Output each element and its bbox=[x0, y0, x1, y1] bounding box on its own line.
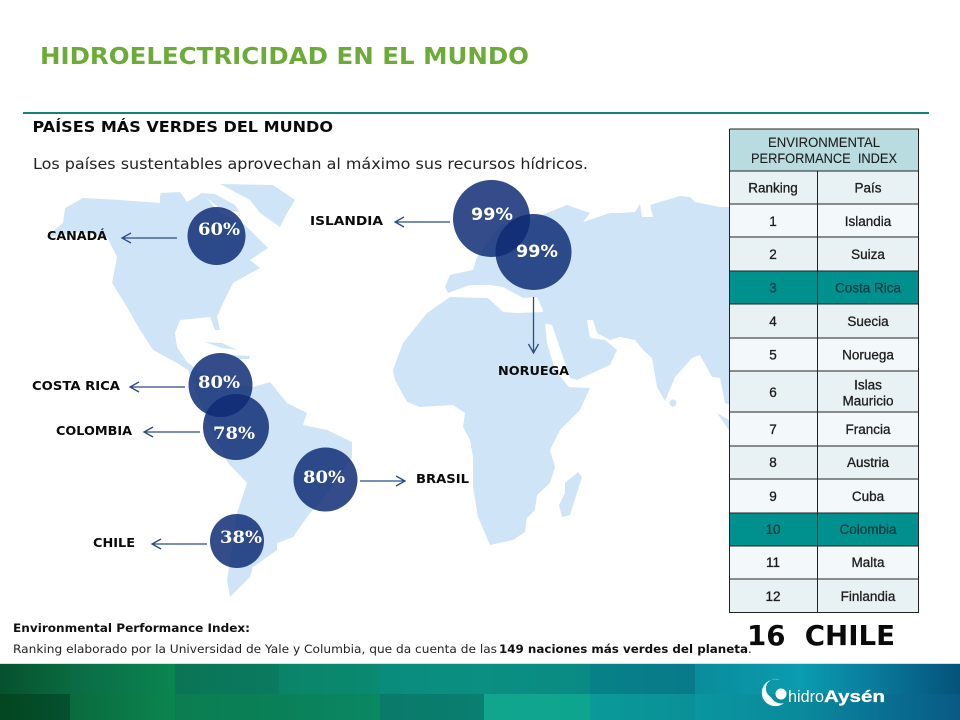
circle: Canadá: 60% bbox=[198, 220, 240, 239]
footer band bbox=[0, 663, 960, 720]
row 3 highlighted: 3 bbox=[769, 280, 777, 296]
row 4: 4 bbox=[769, 314, 777, 329]
row 3 highlighted bbox=[769, 280, 901, 296]
arrow: Chile bbox=[152, 539, 207, 549]
label: Chile: CHILE bbox=[93, 536, 135, 550]
intro text: Los países sustentables aprovechan al máximo sus recursos hídricos. bbox=[33, 155, 588, 173]
row 4 bbox=[769, 314, 889, 329]
footnote text: Ranking elaborado por la Universidad de Yale y Columbia, que da cuenta de las bbox=[13, 642, 497, 656]
row 6: Mauricio bbox=[842, 394, 894, 408]
row 6: Islas bbox=[854, 378, 882, 392]
footnote text: . bbox=[748, 642, 752, 656]
row 2: 2 bbox=[769, 247, 777, 262]
arrow: Islandia bbox=[395, 217, 450, 227]
arrow: Colombia bbox=[144, 427, 200, 437]
circle: Colombia: 78% bbox=[213, 424, 255, 443]
row 8: Austria bbox=[847, 455, 889, 470]
row 1 bbox=[769, 214, 892, 229]
circle: Colombia bbox=[203, 394, 269, 460]
row 10 highlighted: 10 bbox=[765, 522, 781, 537]
row 12: 12 bbox=[765, 589, 781, 604]
row 9 bbox=[769, 489, 885, 504]
row 9: 9 bbox=[769, 489, 777, 504]
label: Costa Rica: COSTA RICA bbox=[32, 379, 121, 393]
footnote heading: Environmental Performance Index: bbox=[13, 621, 250, 635]
row 8 bbox=[769, 455, 889, 470]
row 1: 1 bbox=[769, 214, 777, 229]
row 7 bbox=[769, 422, 891, 437]
arrow: Canadá bbox=[122, 233, 177, 243]
footnote text bbox=[13, 642, 752, 656]
world map bbox=[45, 184, 735, 597]
footnote text: 149 naciones más verdes del planeta bbox=[499, 642, 748, 656]
circle: Costa Rica: 80% bbox=[198, 373, 240, 392]
label: Brasil: BRASIL bbox=[416, 472, 469, 486]
row 12 bbox=[765, 589, 896, 604]
arrow: Brasil bbox=[360, 476, 405, 486]
row 5: 5 bbox=[769, 348, 777, 362]
row 9: Cuba bbox=[852, 489, 885, 504]
row 6 bbox=[769, 378, 894, 408]
row 6: 6 bbox=[769, 385, 777, 400]
column headers: País bbox=[854, 180, 882, 196]
row 11: 11 bbox=[766, 555, 780, 570]
ranking table bbox=[730, 129, 918, 612]
circle: Islandia: 99% bbox=[471, 205, 513, 224]
circle: Islandia bbox=[453, 180, 530, 257]
row 3 highlighted: Costa Rica bbox=[835, 280, 901, 296]
circle: Canadá bbox=[188, 207, 246, 265]
row 10 highlighted: Colombia bbox=[839, 522, 897, 537]
row 7: Francia bbox=[845, 422, 891, 437]
row 8: 8 bbox=[769, 455, 777, 470]
row 4: Suecia bbox=[847, 314, 889, 329]
logo: hidroAysén bbox=[762, 679, 885, 706]
row 2 bbox=[769, 247, 885, 262]
logo: hidroAysén: hidro bbox=[788, 688, 824, 706]
label: Canadá: CANADÁ bbox=[47, 228, 108, 243]
row 2: Suiza bbox=[851, 247, 885, 262]
arrow: Costa Rica bbox=[130, 382, 185, 392]
table header: PERFORMANCE INDEX bbox=[751, 151, 897, 166]
table header: ENVIRONMENTAL bbox=[768, 135, 880, 150]
logo: hidroAysén: Aysén bbox=[824, 688, 885, 706]
column headers: Ranking bbox=[748, 180, 798, 196]
table header bbox=[751, 135, 897, 166]
title: HIDROELECTRICIDAD EN EL MUNDO bbox=[40, 42, 529, 70]
row 11 bbox=[766, 555, 885, 570]
label: Colombia: COLOMBIA bbox=[56, 424, 133, 438]
row 1: Islandia bbox=[845, 214, 892, 229]
section heading: PAÍSES MÁS VERDES DEL MUNDO bbox=[32, 117, 333, 136]
circle: Brasil: 80% bbox=[303, 468, 345, 487]
row 7: 7 bbox=[769, 422, 777, 437]
circle: Noruega: 99% bbox=[516, 242, 558, 261]
row 5 bbox=[769, 348, 894, 362]
arrow: Noruega bbox=[528, 297, 538, 353]
column headers bbox=[748, 180, 882, 196]
row 11: Malta bbox=[851, 555, 885, 570]
row 5: Noruega bbox=[842, 348, 894, 362]
row 10 highlighted bbox=[765, 522, 897, 537]
circle: Chile bbox=[210, 514, 264, 568]
circle: Brasil bbox=[294, 448, 358, 512]
circle: Noruega bbox=[496, 214, 572, 290]
Chile ranking callout: 16 CHILE bbox=[747, 620, 895, 652]
circle: Costa Rica bbox=[188, 353, 252, 417]
label: Noruega: NORUEGA bbox=[498, 364, 570, 378]
row 12: Finlandia bbox=[841, 589, 896, 604]
label: Islandia: ISLANDIA bbox=[310, 214, 384, 228]
circle: Chile: 38% bbox=[220, 528, 262, 547]
